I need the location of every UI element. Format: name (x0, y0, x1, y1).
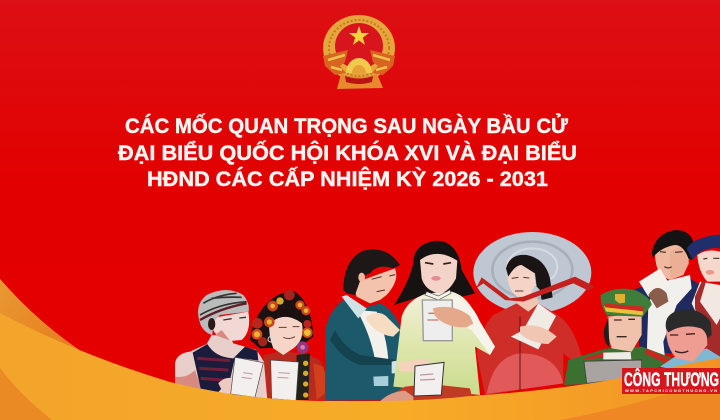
figure: woman in teal suit (325, 249, 423, 401)
back orange wave (0, 279, 90, 360)
title (118, 112, 577, 191)
title: HĐND CÁC CẤP NHIỆM KỲ 2026 - 2031 (147, 166, 548, 191)
ballot box and voter's hand (380, 358, 483, 401)
lower left shade (0, 368, 52, 420)
figure: woman in white ao dai (393, 241, 495, 395)
lower right shade (560, 377, 720, 420)
title: CÁC MỐC QUAN TRỌNG SAU NGÀY BẦU CỬ (125, 112, 568, 138)
figure: soldier in green uniform (564, 289, 673, 385)
logo: Công Thương: WWW.TAPCHICONGTHUONG.VN (625, 388, 717, 393)
figure: woman with traditional headdress (250, 290, 330, 400)
title: ĐẠI BIỂU QUỐC HỘI KHÓA XVI VÀ ĐẠI BIỂU (118, 139, 577, 165)
national emblem (323, 15, 395, 89)
figure: man in blue collar (660, 310, 720, 369)
figure: young man and woman at right (633, 230, 720, 358)
figure: man with striped headband (175, 290, 273, 400)
ballot papers held by first two figures (231, 357, 299, 401)
front orange wave (0, 313, 720, 420)
figure: hat and woman in red (473, 232, 595, 395)
